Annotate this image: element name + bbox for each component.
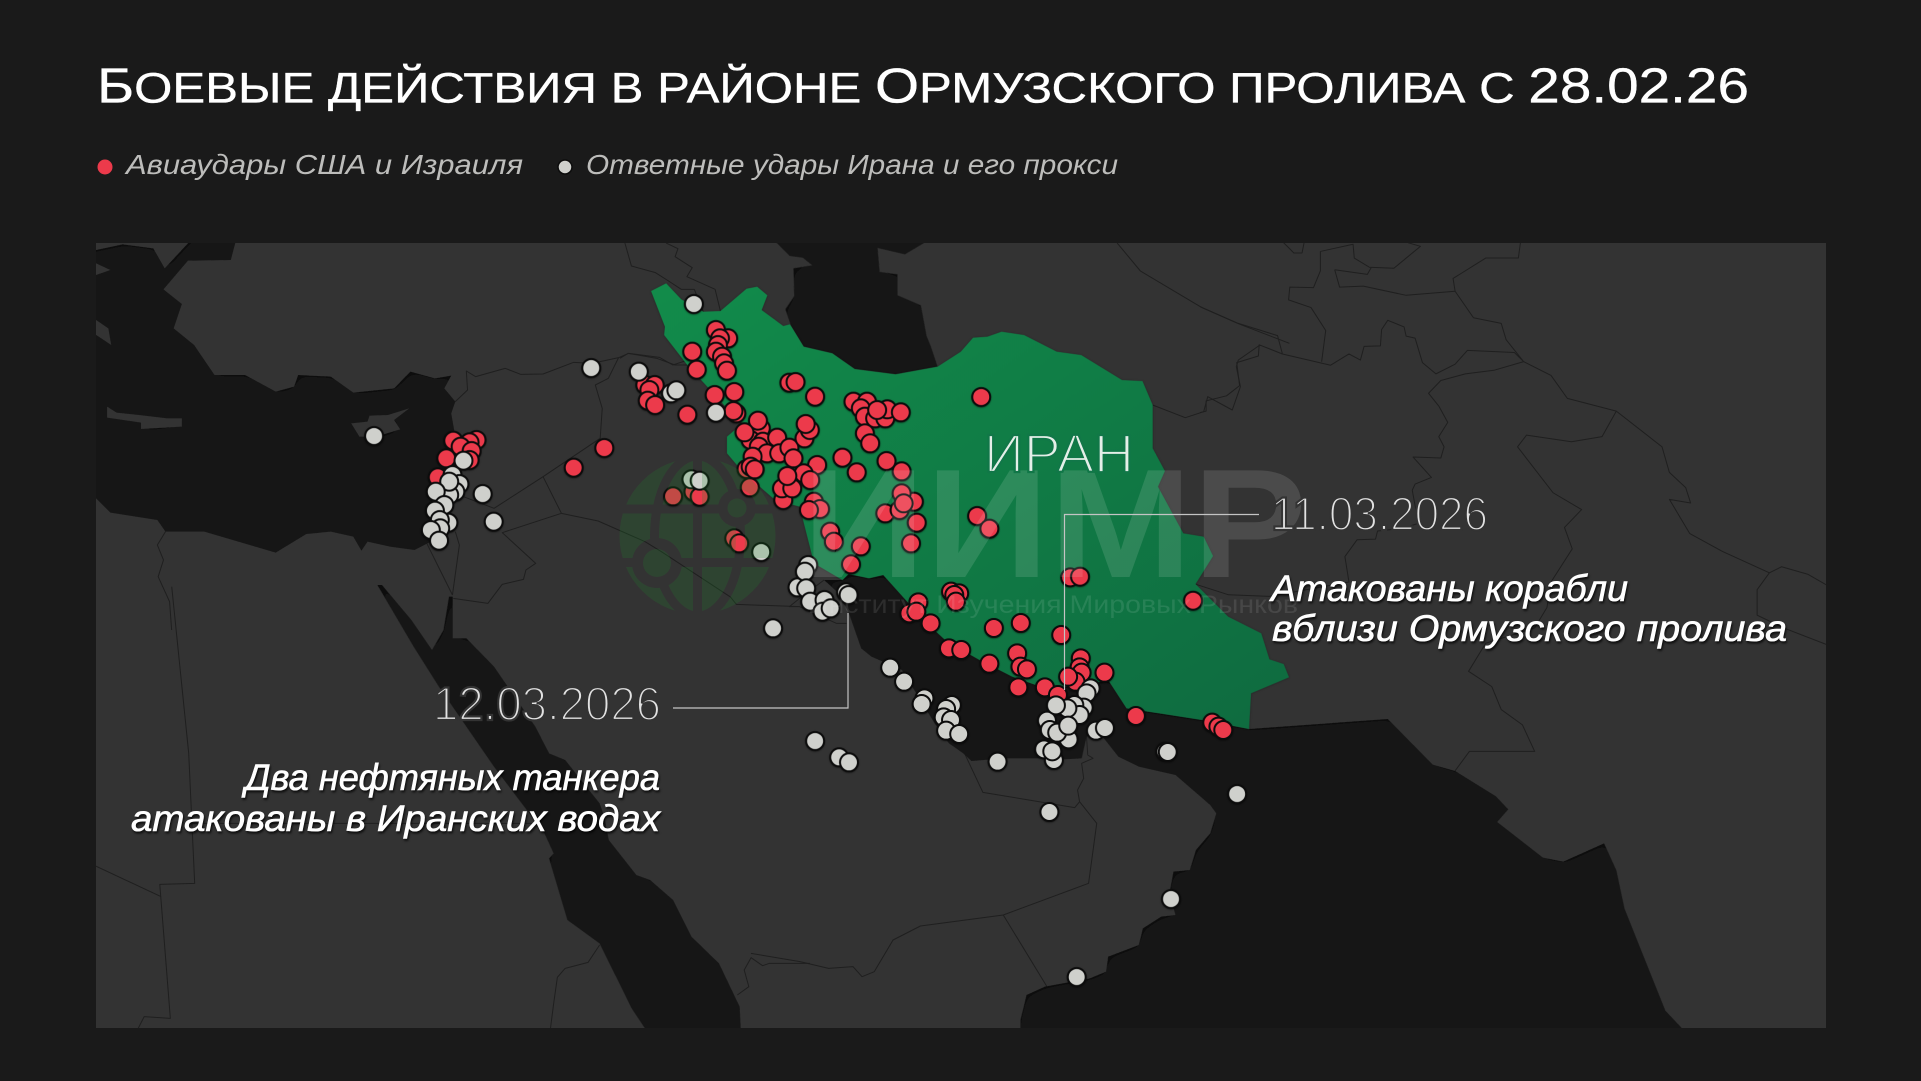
legend marker: Iran retaliation bbox=[558, 160, 572, 174]
map panel bbox=[66, 223, 1829, 1060]
legend label: Iran retaliation: Ответные удары Ирана и его прокси bbox=[586, 149, 1118, 180]
sea: Persian Gulf and Arabian Sea bbox=[824, 574, 1682, 1028]
callout: 11.03.2026 leader line bbox=[1064, 514, 1259, 690]
strike markers bbox=[365, 295, 1246, 986]
legend bbox=[98, 149, 1118, 180]
legend marker: US and Israel airstrikes bbox=[98, 160, 112, 174]
sea: Caspian bbox=[776, 243, 938, 374]
title: БОЕВЫЕ ДЕЙСТВИЯ В РАЙОНЕ ОРМУЗСКОГО ПРОЛИВА С 28.02.26 bbox=[97, 60, 1749, 114]
red markers: US and Israel airstrikes bbox=[429, 321, 1232, 739]
callout: date 12.03.2026: 12.03.2026 bbox=[433, 677, 661, 730]
watermark: institute name: Институт Изучения Мировых Рынков bbox=[808, 591, 1298, 619]
Iran territory bbox=[651, 283, 1289, 729]
country borders bbox=[96, 243, 1829, 1028]
callout: ships attacked: вблизи Ормузского пролива bbox=[1272, 608, 1787, 649]
watermark: globe logo bbox=[620, 461, 776, 611]
callout: date 11.03.2026: 11.03.2026 bbox=[1271, 487, 1488, 540]
label: Iran: ИРАН bbox=[984, 424, 1134, 484]
callout: ships attacked: Атакованы корабли bbox=[1269, 568, 1628, 609]
watermark: ИИМР wordmark: ИИМР bbox=[802, 437, 1307, 610]
seas bbox=[66, 223, 1718, 1060]
land base bbox=[96, 243, 1826, 1028]
callout: tankers attacked: Два нефтяных танкера bbox=[241, 757, 660, 798]
callout: 12.03.2026 leader line bbox=[673, 613, 848, 708]
grey markers: Iran and proxy retaliation bbox=[365, 295, 1246, 986]
sea: Mediterranean bbox=[66, 237, 455, 553]
sea: Red Sea bbox=[377, 585, 742, 1053]
legend label: US and Israel airstrikes: Авиаудары США и Израиля bbox=[124, 149, 523, 180]
callout: tankers attacked: атакованы в Иранских водах bbox=[131, 798, 662, 839]
